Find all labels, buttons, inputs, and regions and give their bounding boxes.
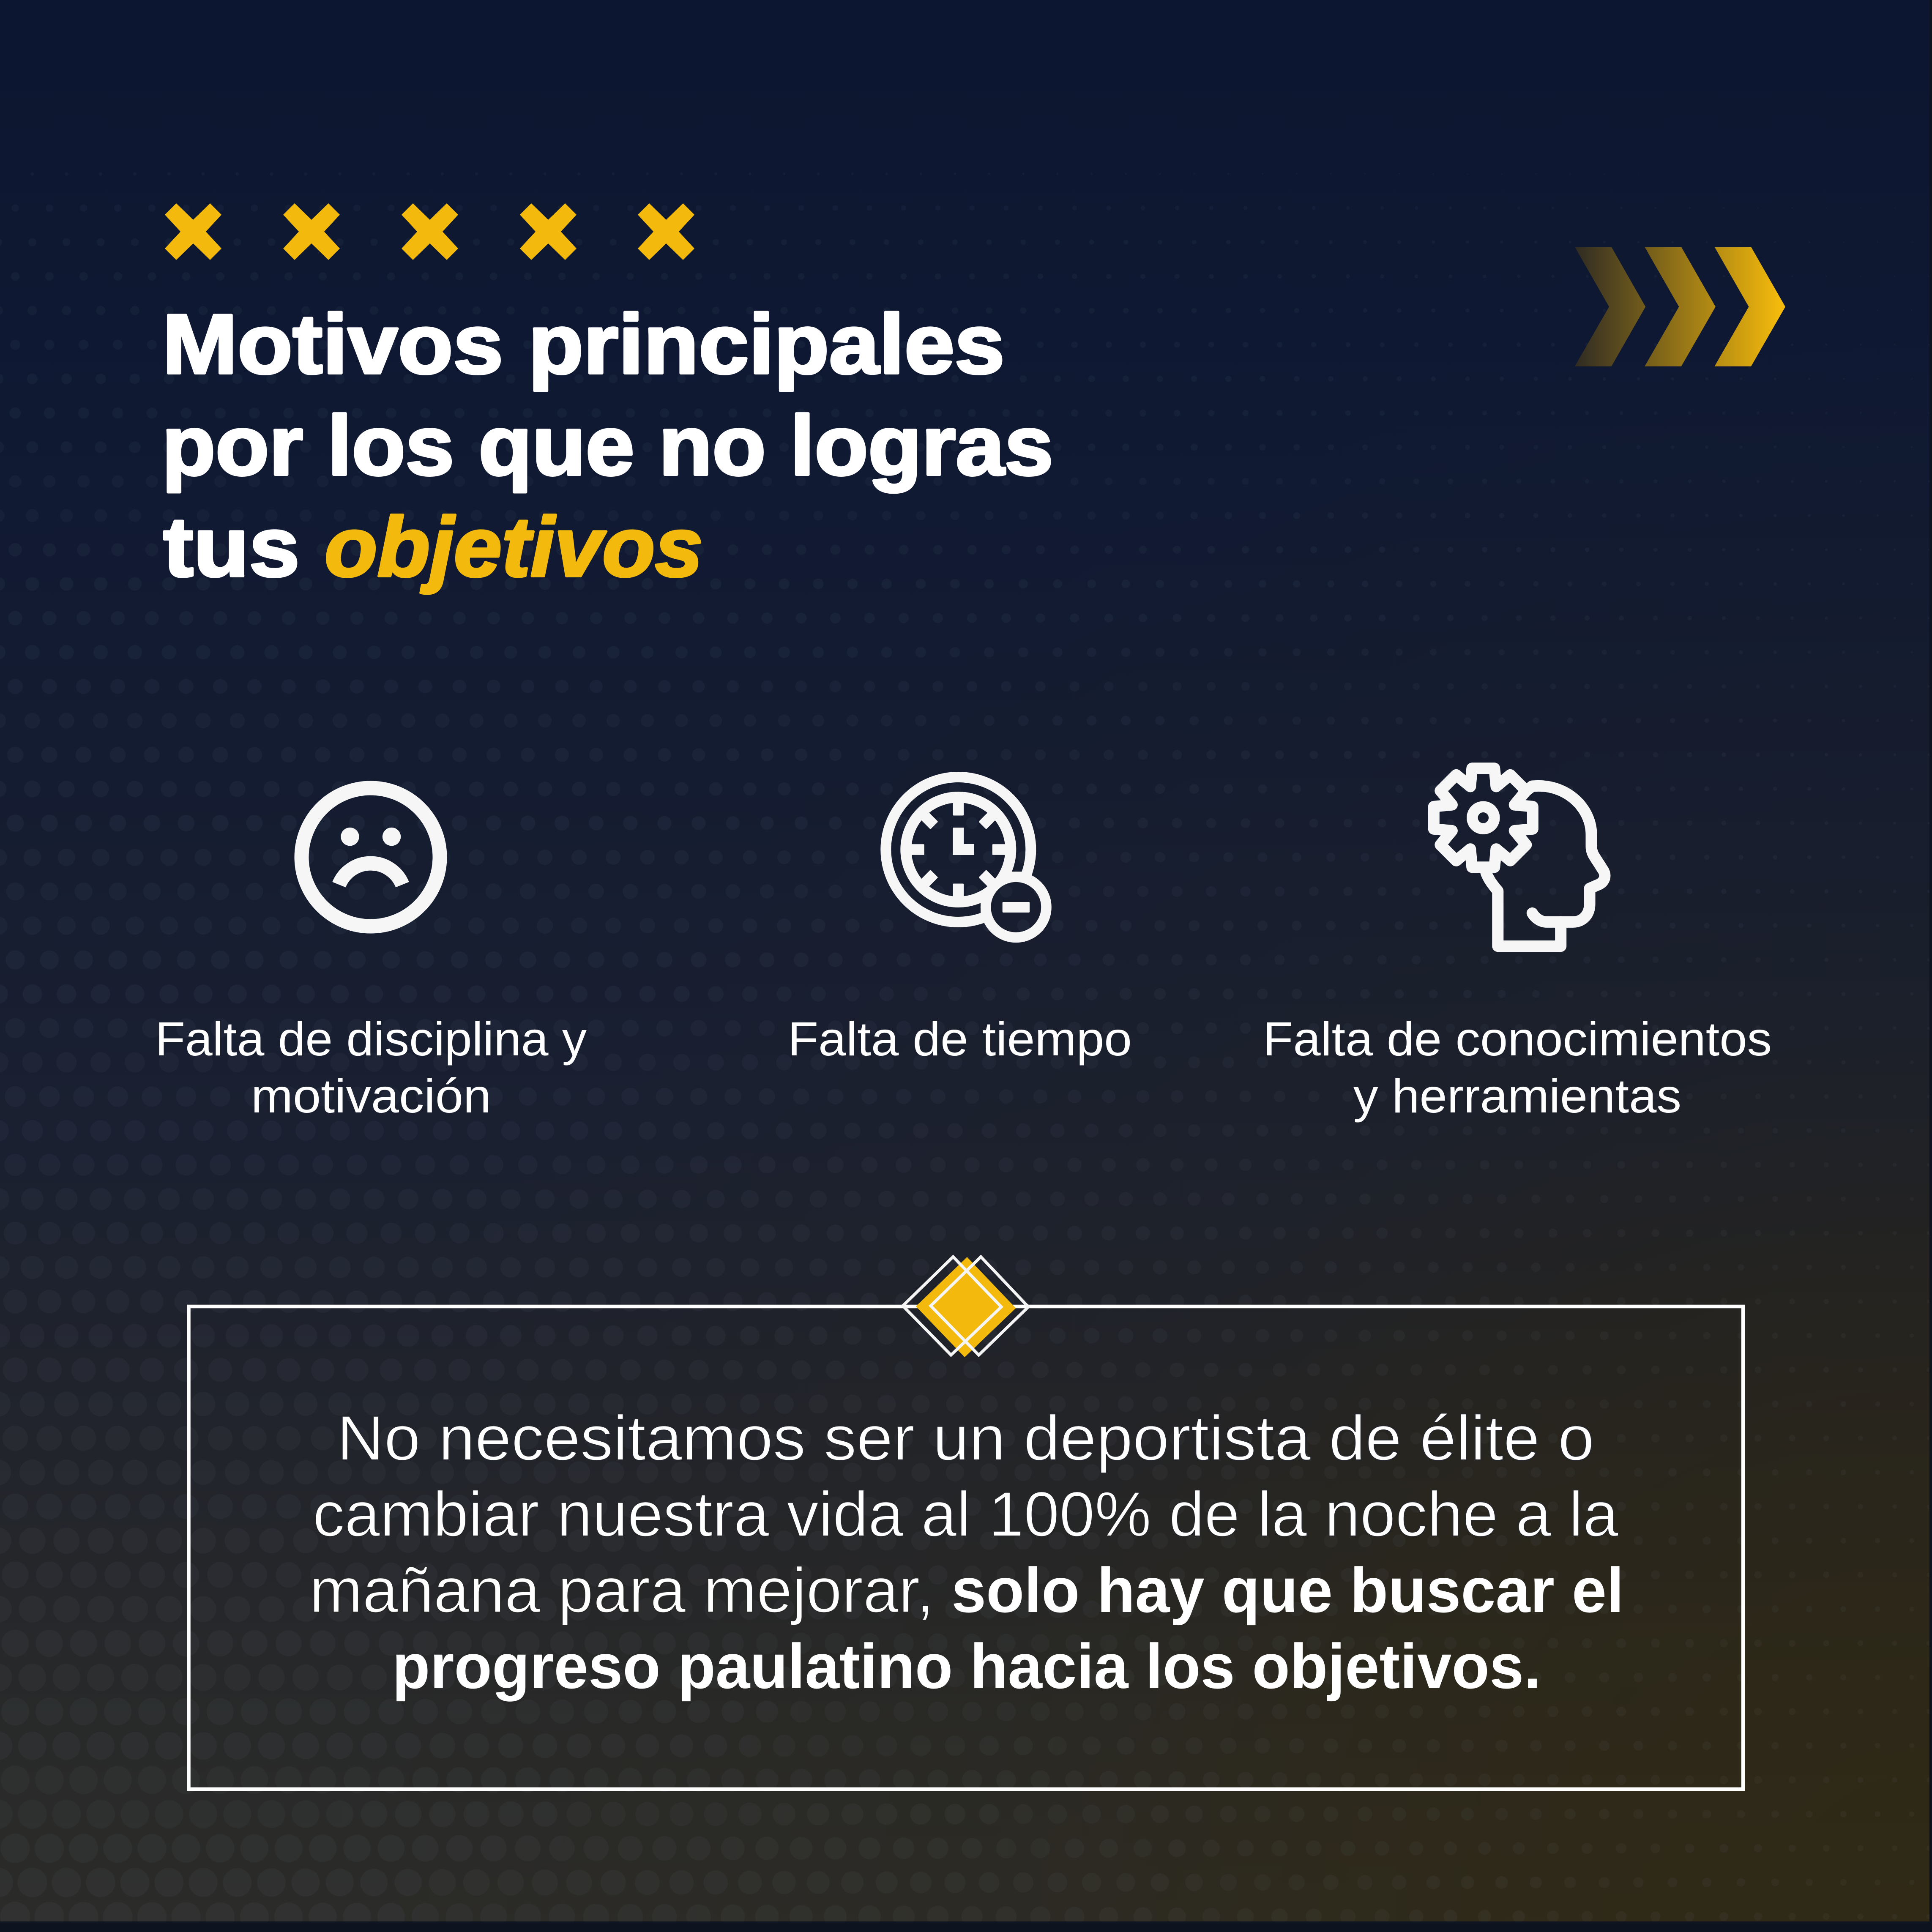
title: tus xyxy=(163,500,300,594)
icon: sad face xyxy=(302,788,440,926)
title: objetivos xyxy=(325,500,703,594)
icon: overlapping diamonds xyxy=(903,1257,1028,1357)
label: falta de tiempo: Falta de tiempo xyxy=(788,1012,1132,1066)
label: falta de disciplina y motivacion: Falta de disciplina y xyxy=(155,1012,587,1066)
title xyxy=(162,297,1053,594)
title: por los que no logras xyxy=(162,399,1053,493)
callout paragraph: mañana para mejorar, xyxy=(309,1555,934,1626)
label: falta de disciplina y motivacion: motivación xyxy=(251,1069,491,1123)
label: falta de disciplina y motivacion xyxy=(155,1012,587,1123)
callout paragraph xyxy=(309,1402,1624,1702)
title: Motivos principales xyxy=(162,297,1005,391)
callout paragraph: progreso paulatino hacia los objetivos. xyxy=(392,1631,1541,1702)
label: falta de conocimientos y herramientas xyxy=(1263,1012,1772,1123)
icon: head with gear xyxy=(1434,768,1605,946)
row of five yellow X marks xyxy=(165,203,694,260)
callout paragraph: No necesitamos ser un deportista de élite o xyxy=(337,1402,1594,1473)
label: falta de conocimientos y herramientas: y herramientas xyxy=(1353,1069,1681,1123)
icon: three chevron arrows xyxy=(1575,247,1785,366)
callout paragraph: cambiar nuestra vida al 100% de la noche a la xyxy=(313,1478,1619,1549)
callout box xyxy=(189,1257,1743,1789)
label: falta de conocimientos y herramientas: Falta de conocimientos xyxy=(1263,1012,1772,1066)
icon: clock with minus sign xyxy=(886,777,1047,937)
callout paragraph: solo hay que buscar el xyxy=(951,1555,1624,1626)
